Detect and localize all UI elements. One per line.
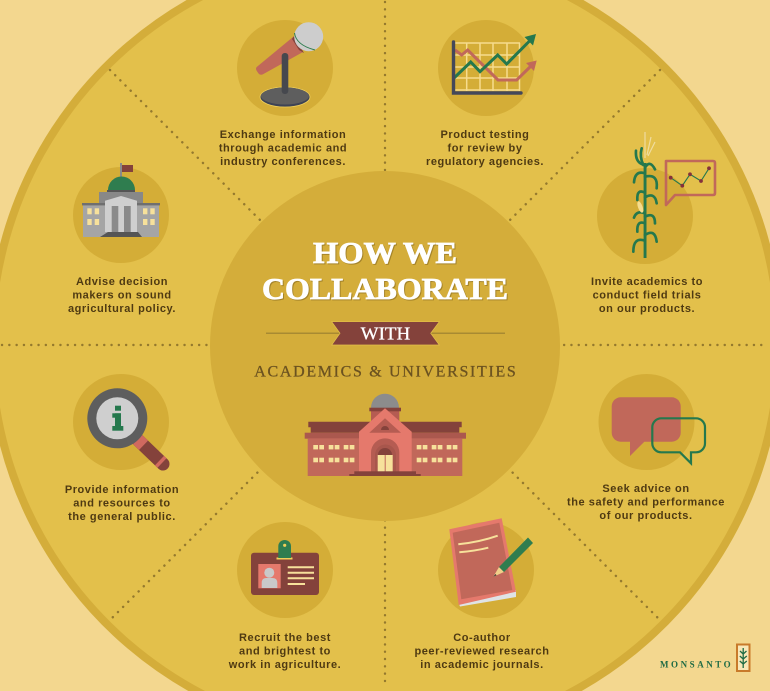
icon: speech bubbles <box>598 374 705 470</box>
text: field trials <box>591 276 703 315</box>
text: journals <box>414 632 550 671</box>
banner: with: WITH <box>361 323 410 343</box>
logo: monsanto <box>660 644 750 671</box>
text: general public: the general public. <box>68 511 176 523</box>
text: conferences: industry conferences. <box>220 156 346 168</box>
text: safety advice: the safety and performance <box>567 496 725 508</box>
logo: monsanto: MONSANTO <box>660 659 731 669</box>
text: policy: agricultural policy. <box>68 303 176 315</box>
text: safety advice <box>567 483 725 522</box>
icon: magnifying glass with info <box>73 374 169 470</box>
text: recruit: Recruit the best <box>239 632 331 644</box>
text: conferences <box>219 129 347 168</box>
icon: microphone <box>237 20 333 116</box>
text: general public <box>65 484 179 523</box>
text: policy: Advise decision <box>76 276 168 288</box>
text: recruit <box>228 632 341 671</box>
title <box>262 235 508 306</box>
text: product testing <box>426 129 544 168</box>
icon: journal and pencil <box>438 518 534 618</box>
text: conferences: through academic and <box>219 142 347 154</box>
center circle panel <box>210 171 560 521</box>
text: general public: Provide information <box>65 484 179 496</box>
text: product testing: for review by <box>447 142 523 154</box>
text: policy <box>68 276 176 315</box>
text: product testing: Product testing <box>441 129 529 141</box>
icon: id badge <box>237 522 333 618</box>
text: journals: in academic journals. <box>420 659 544 671</box>
title: COLLABORATE <box>262 271 508 306</box>
text: recruit: and brightest to <box>239 646 331 658</box>
text: conferences: Exchange information <box>220 129 346 141</box>
text: safety advice: of our products. <box>599 510 693 522</box>
icon: university building <box>305 394 466 476</box>
icon: corn and chart bubble <box>597 132 715 264</box>
text: recruit: work in agriculture. <box>228 659 341 671</box>
subtitle: ACADEMICS & UNIVERSITIES <box>254 364 516 381</box>
title: HOW WE <box>313 235 457 270</box>
text: journals: peer-reviewed research <box>414 646 550 658</box>
text: field trials: Invite academics to <box>591 276 703 288</box>
text: field trials: on our products. <box>599 303 695 315</box>
text: policy: makers on sound <box>72 290 172 302</box>
icon: line chart <box>438 20 537 116</box>
banner: with <box>266 322 505 345</box>
text: product testing: regulatory agencies. <box>426 156 544 168</box>
text: journals: Co-author <box>453 632 511 644</box>
text: safety advice: Seek advice on <box>602 483 690 495</box>
text: general public: and resources to <box>73 498 171 510</box>
text: field trials: conduct field trials <box>593 290 701 302</box>
icon: capitol building <box>73 163 169 263</box>
